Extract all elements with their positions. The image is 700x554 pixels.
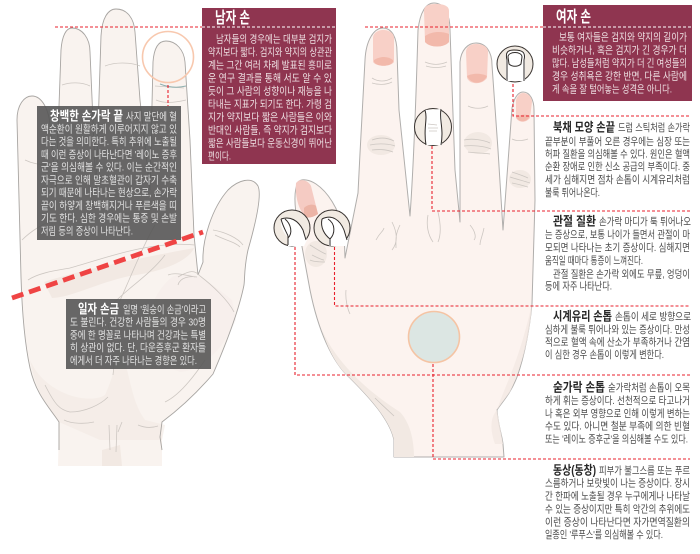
text block: joint disease: 관절 질환 bbox=[553, 214, 596, 228]
panel: man's hand bbox=[202, 8, 336, 164]
icon: little fingernail bbox=[516, 93, 532, 122]
text block: joint disease: 움직일 때마다 통증이 느껴진다. bbox=[545, 254, 643, 267]
text block: clubbed finger: 북채 모양 손끝 bbox=[553, 120, 615, 134]
panel: pale fingertip: 기도 한다. 심한 경우에는 통증 및 손발 bbox=[41, 212, 177, 225]
panel: pale fingertip: 끝이 하얗게 창백해지거나 푸른색을 띠 bbox=[41, 199, 177, 212]
text block: woman's hand bbox=[552, 30, 687, 96]
text block: man's hand: 반대인 사람들, 즉 약지가 검지보다 bbox=[208, 123, 332, 136]
inset: swollen joint bbox=[414, 108, 452, 146]
heading: man's hand: 남자 손 bbox=[215, 9, 250, 27]
text block: man's hand: 듯이 그 사람의 성향이나 재능을 나 bbox=[208, 84, 332, 97]
arrow: simian crease marker bbox=[12, 232, 203, 298]
panel: pale fingertip: 사지 말단에 혈 bbox=[126, 110, 177, 123]
panel: pale fingertip bbox=[37, 106, 181, 240]
text block: frostbite: 동상(동창) bbox=[553, 462, 596, 478]
text block: man's hand: 약지보다 짧다. 검지와 약지의 상관관 bbox=[208, 46, 332, 58]
panel: simian crease bbox=[66, 299, 211, 369]
icon: thumbnail bbox=[296, 180, 318, 218]
inset: watch-glass nail profile bbox=[314, 210, 350, 246]
inset: spoon nail bbox=[274, 210, 310, 246]
text block: man's hand: 편이다. bbox=[208, 149, 231, 162]
divider: finger length reference, right hand bbox=[365, 26, 543, 28]
connector: thumb nail to text bbox=[334, 247, 690, 306]
connector: joint disease to text bbox=[432, 146, 690, 211]
illustration: right hand back bbox=[295, 3, 535, 457]
text block: man's hand: 남자들의 경우에는 대부분 검지가 bbox=[216, 32, 332, 46]
connector: man's ring finger bbox=[167, 85, 169, 106]
icon: ring fingernail bbox=[466, 44, 488, 83]
panel: pale fingertip: 때 이런 증상이 나타난다면 '레이노 증후 bbox=[41, 149, 177, 161]
connector: spoon nail to text bbox=[295, 247, 690, 375]
panel: simian crease: 일자 손금 bbox=[78, 302, 119, 316]
panel: simian crease: 에게서 더 자주 나타나는 경향은 있다. bbox=[70, 354, 197, 367]
panel: simian crease: 도 불린다. 건강한 사람들의 경우 30명 bbox=[70, 316, 206, 328]
panel: pale fingertip: 창백한 손가락 끝 bbox=[50, 108, 123, 124]
text block: frostbite: 일종인 '루푸스'를 의심해볼 수 있다. bbox=[545, 528, 663, 541]
text block: watch-glass nail bbox=[545, 310, 691, 361]
text block: man's hand: 지가 약지보다 짧은 사람들은 이와 bbox=[208, 110, 332, 123]
text block: watch-glass nail: 이 심한 경우 손톱이 이렇게 변한다. bbox=[545, 348, 664, 361]
heading: woman's hand: 여자 손 bbox=[556, 8, 591, 26]
divider: finger length reference, woman's panel bbox=[543, 26, 692, 28]
text block: man's hand: 계는 그간 여러 차례 발표된 흥미로 bbox=[208, 58, 332, 72]
divider: finger length reference, man's panel bbox=[202, 26, 335, 28]
callout: man's ring finger circle bbox=[142, 32, 194, 82]
panel: woman's hand bbox=[543, 5, 692, 101]
icon: middle fingernail bbox=[424, 4, 449, 46]
text block: man's hand bbox=[208, 32, 332, 162]
text block: man's hand: 짧은 사람들보다 운동신경이 뛰어난 bbox=[208, 136, 332, 149]
text block: joint disease: 등에 자주 나타난다. bbox=[545, 280, 612, 292]
connector: clubbed finger to text bbox=[513, 84, 690, 116]
inset: clubbed fingertip bbox=[497, 46, 533, 82]
text block: clubbed finger bbox=[545, 120, 690, 199]
panel: pale fingertip: 다는 것을 의미한다. 특히 추위에 노출될 bbox=[41, 135, 177, 148]
text block: spoon nail: 숟가락 손톱 bbox=[553, 380, 605, 394]
panel: simian crease: 중에 한 명꼴로 나타나며 건강과는 특별 bbox=[70, 329, 206, 341]
text block: watch-glass nail: 시계유리 손톱 bbox=[553, 310, 612, 324]
text block: joint disease bbox=[545, 214, 691, 292]
text block: frostbite bbox=[545, 462, 690, 541]
icon: index fingernail bbox=[373, 30, 394, 66]
text block: man's hand: 운 연구 결과를 통해 서도 알 수 있 bbox=[208, 72, 332, 84]
connector: watch-glass nail to text bbox=[433, 364, 690, 459]
divider: finger length reference, left part bbox=[55, 26, 202, 28]
text block: clubbed finger: 불룩 튀어나온다. bbox=[545, 187, 600, 199]
callout: watch-glass nail circle bbox=[408, 312, 460, 362]
panel: pale fingertip: 되기 때문에 나타나는 현상으로, 손가락 bbox=[41, 187, 177, 199]
panel: pale fingertip: 액순환이 원활하게 이루어지지 않고 있 bbox=[41, 122, 177, 136]
panel: pale fingertip: 저림 등의 증상이 나타난다. bbox=[41, 226, 133, 238]
panel: simian crease: 일명 '원숭이 손금'이라고 bbox=[123, 303, 206, 316]
panel: pale fingertip: 자극으로 인해 말초혈관이 갑자기 수축 bbox=[41, 173, 177, 186]
panel: simian crease: 히 상관이 없다. 단, 다운증후군 환자들 bbox=[70, 341, 206, 354]
panel: pale fingertip: 군'을 의심해볼 수 있다. 이는 순간적인 bbox=[41, 161, 177, 174]
illustration: left hand palm bbox=[17, 9, 259, 466]
text block: spoon nail bbox=[545, 380, 690, 446]
text block: man's hand: 타내는 지표가 되기도 한다. 가령 검 bbox=[208, 98, 332, 110]
